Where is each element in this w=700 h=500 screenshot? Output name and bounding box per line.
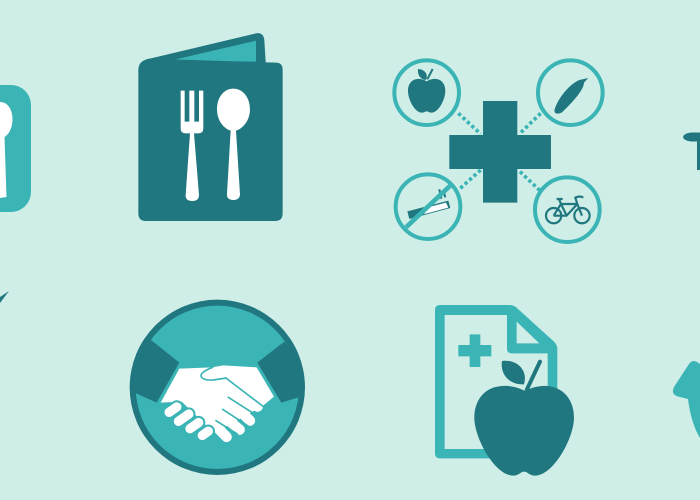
icon: no smoking circle	[396, 174, 460, 239]
icon: fork	[181, 91, 203, 201]
icon: bicycle in circle	[535, 177, 600, 242]
icon: cropped shape at right edge	[683, 132, 700, 170]
apple	[474, 361, 574, 476]
document fold	[517, 322, 539, 343]
icon: spoon	[217, 89, 250, 200]
icon: health cross with healthy habits	[394, 60, 603, 242]
dotted connectors	[458, 113, 541, 190]
icon: medical record with apple	[435, 305, 574, 476]
icon: handshake in circle	[130, 300, 305, 475]
sleeves	[134, 340, 300, 403]
icon: chili pepper in circle	[538, 60, 603, 125]
icon: cropped arrow at right edge	[673, 361, 700, 438]
document outline	[435, 305, 557, 458]
icon: menu with fork and spoon	[138, 33, 283, 221]
clasped hands	[161, 365, 274, 443]
icon: medical cross	[449, 101, 551, 203]
icon: cropped leaf at left edge	[0, 291, 9, 303]
icon: apple in circle	[394, 60, 459, 125]
icon: cropped cutlery tile at left edge	[0, 85, 31, 212]
small cross	[458, 334, 491, 367]
